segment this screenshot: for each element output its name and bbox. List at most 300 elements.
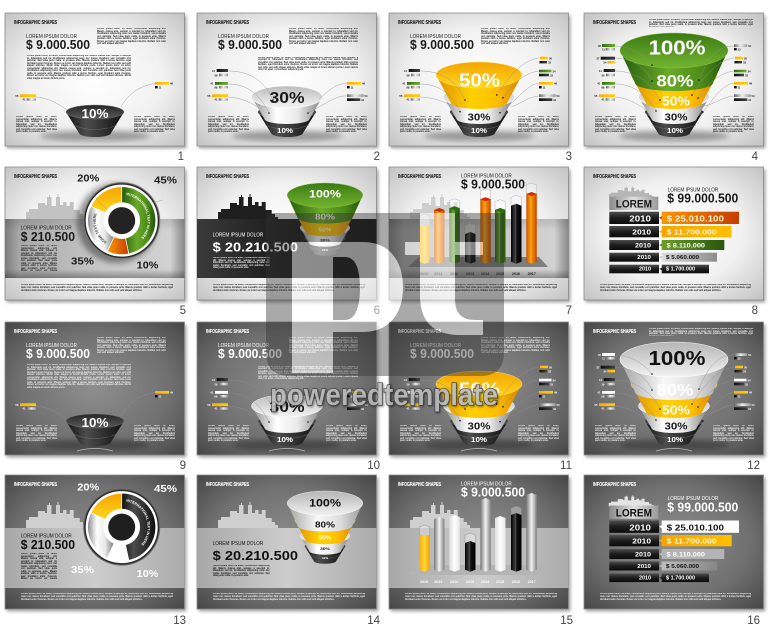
percent labels: 10% (137, 261, 158, 272)
text block: lower left: Lorem ipsum dolor sit amet, consectetur adipiscing elit. Mauris massa erat, semper a suscipit in, bibendum sed mi. Vestibulum adipiscing nunc nec metus tincidunt, sed convallis orci pulvinar. Sed vitae justo nulla, in posuere ante. (400, 425, 441, 442)
slide numbers: 15 (560, 615, 573, 627)
panel: slide 10 (197, 322, 378, 458)
bars: right: 13 (738, 356, 741, 360)
slide numbers (173, 151, 760, 627)
year labels: 2016 (512, 580, 520, 584)
bars: right: 50 (549, 56, 553, 60)
skyline (609, 186, 654, 197)
bars: right: 49 (362, 391, 366, 395)
label: LOREM IPSUM DOLOR (218, 34, 269, 40)
bars: left (207, 378, 228, 411)
panel: slide 5 (4, 166, 188, 304)
bars: left: 98 (601, 394, 605, 398)
bars: left: 37 (596, 366, 600, 370)
row 5: 2010 (639, 267, 651, 273)
row 4: 2010 (637, 255, 651, 261)
funnel percent labels: 80% (315, 519, 336, 529)
donut chart (83, 489, 160, 566)
bars: left: 55 (594, 94, 598, 98)
bars: right: 13 (738, 47, 741, 51)
row 1: $ 25.010.100 (667, 522, 724, 532)
year labels: 2013 (466, 272, 474, 276)
funnel: all tiers: 100% (648, 348, 706, 370)
year labels (420, 580, 536, 584)
bars: left: 41 (210, 82, 214, 86)
funnel: 30% and 10% tiers (228, 71, 347, 142)
bar chart platform (408, 565, 548, 575)
bars: left: 41 (210, 391, 214, 395)
row 2 (609, 226, 732, 237)
row 5: 2010 (639, 575, 651, 581)
funnel: all tiers (615, 342, 734, 451)
text block: intro: Lorem ipsum dolor sit amet, consectetur adipiscing elit. Mauris massa erat, semper a suscipit in, bibendum sed mi. Vestibulum adipiscing nunc nec metus tincidunt, sed convallis orci pulvinar. Sed vitae justo nulla, in posuere ante. Mauris pretium nibh a lectus facilisis, eget tincidunt enim rhoncus. Donec eu tortor vel magna dapibus lobortis. Nullam non odio sed velit aliquet ultricies. (289, 337, 358, 354)
amount: $ 210.500 (21, 230, 75, 244)
bars: left: 39 (601, 73, 605, 77)
skyline (218, 502, 278, 528)
bars: left: 41 (597, 391, 601, 395)
bars: right: 49 (362, 82, 366, 86)
bars: right: 33 (550, 73, 554, 77)
slide numbers: 10 (367, 460, 380, 472)
funnel: all tiers: 10% (667, 435, 683, 444)
funnel percent labels: 10% (322, 248, 328, 252)
funnel: 10% bowl: 10% (82, 415, 109, 430)
row 4: $ 5.060.000 (666, 564, 699, 570)
bars: right: 54 (752, 94, 755, 98)
bars: left: 45 (598, 44, 601, 48)
heading: INFOGRAPHIC SHAPES (206, 482, 249, 488)
bars: left: 55 (15, 94, 19, 98)
bars: left: 55 (207, 403, 211, 407)
funnel: all tiers: 50% (662, 94, 690, 108)
funnel percent labels: 50% (318, 536, 332, 542)
band (197, 528, 376, 588)
panel: slide 11 (389, 322, 570, 458)
funnel: 50%, 30%, 10% tiers: 30% (468, 113, 491, 124)
bar chart platform (408, 257, 548, 267)
row 1: 2010 (629, 214, 651, 224)
text block: bottom paragraph: Lorem ipsum dolor sit amet, consectetur adipiscing elit. Mauris massa erat, semper a suscipit in, bibendum sed mi. Vestibulum adipiscing nunc nec metus tincidunt, sed convallis orci pulvinar. Sed vitae justo nulla, in posuere ante. Mauris pretium nibh a lectus facilisis, eget tincidunt enim rhoncus. Donec eu tortor vel magna dapibus lobortis. Nullam non odio sed velit aliquet ultricies. (21, 284, 173, 292)
bars: left: 39 (214, 382, 218, 386)
year labels: 2010 (420, 580, 428, 584)
bars: right: 44 (553, 98, 557, 102)
donut chart: SOME TEXT HERE (93, 213, 106, 244)
year labels: 2012 (450, 272, 458, 276)
bars: left (399, 378, 420, 411)
text block: bottom paragraph: Lorem ipsum dolor sit amet, consectetur adipiscing elit. Mauris massa erat, semper a suscipit in, bibendum sed mi. Vestibulum adipiscing nunc nec metus tincidunt, sed convallis orci pulvinar. Sed vitae justo nulla, in posuere ante. Mauris pretium nibh a lectus facilisis, eget tincidunt enim rhoncus. Donec eu tortor vel magna dapibus lobortis. Nullam non odio sed velit aliquet ultricies. (600, 284, 751, 292)
row 5 (609, 265, 709, 273)
bars: left: 41 (214, 98, 218, 102)
row 4 (609, 562, 717, 570)
row 3: $ 8.110.000 (667, 551, 705, 558)
bars: left: 41 (406, 407, 410, 411)
funnel: 10% bowl: 10% (82, 106, 109, 121)
funnel: all tiers (615, 33, 734, 142)
bars: left: 41 (406, 98, 410, 102)
row 1 (609, 212, 739, 224)
skyline (410, 502, 470, 528)
bars: right (155, 82, 174, 89)
bars: right (155, 391, 174, 398)
bars: right: 11 (542, 394, 546, 398)
slide numbers: 3 (566, 151, 572, 163)
funnel: small (287, 183, 363, 256)
slide numbers: 5 (180, 305, 186, 317)
bars: right: 44 (553, 407, 557, 411)
bars: left: 11 (602, 356, 605, 360)
year labels: 2011 (434, 272, 442, 276)
text block: lower left: Lorem ipsum dolor sit amet, consectetur adipiscing elit. Mauris massa erat, semper a suscipit in, bibendum sed mi. Vestibulum adipiscing nunc nec metus tincidunt, sed convallis orci pulvinar. Sed vitae justo nulla, in posuere ante. (400, 116, 441, 133)
band (5, 219, 184, 278)
bars: right: 54 (748, 44, 752, 48)
panel: slide 16 (584, 475, 766, 612)
band (197, 219, 376, 278)
bars: right: 44 (748, 98, 752, 102)
row 3 (609, 240, 724, 250)
bars: left: 14 (212, 69, 215, 73)
text block: lower left: Lorem ipsum dolor sit amet, consectetur adipiscing elit. Mauris massa erat, semper a suscipit in, bibendum sed mi. Vestibulum adipiscing nunc nec metus tincidunt, sed convallis orci pulvinar. Sed vitae justo nulla, in posuere ante. (595, 425, 636, 442)
slide numbers: 14 (367, 615, 381, 627)
year labels: 2011 (434, 580, 442, 584)
slide numbers: 11 (560, 460, 572, 472)
bars: left: 41 (22, 98, 26, 102)
funnel: 50%, 30%, 10% tiers (420, 58, 539, 142)
skyline (609, 495, 654, 506)
slide numbers: 16 (747, 615, 760, 627)
text block: intro: Lorem ipsum dolor sit amet, consectetur adipiscing elit. Mauris massa erat, semper a suscipit in, bibendum sed mi. Vestibulum adipiscing nunc nec metus tincidunt, sed convallis orci pulvinar. Sed vitae justo nulla, in posuere ante. Mauris pretium nibh a lectus facilisis, eget tincidunt enim rhoncus. Donec eu tortor vel magna dapibus lobortis. Nullam non odio sed velit aliquet ultricies. (481, 337, 550, 354)
percent labels: 35% (71, 256, 94, 267)
bars: right: 49 (170, 82, 174, 86)
bars: right: 11 (158, 85, 162, 89)
panel: slide 12 (584, 322, 766, 458)
label: LOREM IPSUM DOLOR (668, 187, 718, 193)
slide numbers: 2 (374, 151, 380, 163)
heading: INFOGRAPHIC SHAPES (593, 20, 636, 26)
label: LOREM IPSUM DOLOR (410, 343, 461, 349)
text block: lower right: Lorem ipsum dolor sit amet, consectetur adipiscing elit. Mauris massa erat, semper a suscipit in, bibendum sed mi. Vestibulum adipiscing nunc nec metus tincidunt, sed convallis orci pulvinar. Sed vitae justo nulla, in posuere ante. (518, 116, 559, 133)
bars: left: 14 (404, 378, 407, 382)
panel: slide 2 (197, 13, 378, 148)
row 5: $ 1.700.000 (666, 267, 695, 273)
percent labels: 35% (71, 565, 94, 576)
bars: left: 34 (603, 60, 607, 64)
bars: right (539, 365, 560, 411)
funnel percent labels (309, 189, 341, 252)
row 4 (609, 253, 717, 262)
text block: bottom paragraph: Lorem ipsum dolor sit amet, consectetur adipiscing elit. Mauris massa erat, semper a suscipit in, bibendum sed mi. Vestibulum adipiscing nunc nec metus tincidunt, sed convallis orci pulvinar. Sed vitae justo nulla, in posuere ante. Mauris pretium nibh a lectus facilisis, eget tincidunt enim rhoncus. Donec eu tortor vel magna dapibus lobortis. Nullam non odio sed velit aliquet ultricies. (405, 593, 557, 601)
bars: right: 11 (350, 85, 354, 89)
funnel: all tiers: 80% (656, 71, 694, 90)
bar chart (419, 493, 537, 572)
text block: centre paragraph: Lorem ipsum dolor sit amet, consectetur adipiscing elit. Mauris massa erat, semper a suscipit in, bibendum sed mi. Vestibulum adipiscing nunc nec metus tincidunt, sed convallis orci pulvinar. Sed vitae justo nulla, in posuere ante. Mauris pretium nibh a lectus facilisis, eget tincidunt enim rhoncus. Donec eu tortor vel magna dapibus lobortis. Nullam non odio sed velit aliquet ultricies. Morbi vitae magna et lorem dictum porta. Lorem ipsum dolor sit amet, consectetur adipiscing elit. (258, 56, 358, 71)
label: LOREM IPSUM DOLOR (26, 34, 77, 40)
bars: right (347, 391, 368, 411)
funnel percent labels: 30% (320, 546, 331, 551)
band (389, 219, 568, 278)
funnel: all tiers: 30% (664, 112, 688, 123)
bars: right: 44 (361, 407, 365, 411)
percent labels: 10% (137, 569, 158, 580)
amount: $ 99.000.500 (667, 192, 738, 206)
funnel: 50%, 30%, 10% tiers (420, 367, 539, 451)
bars: left: 98 (214, 85, 218, 89)
percent labels: 20% (77, 483, 99, 494)
text block: intro: Lorem ipsum dolor sit amet, consectetur adipiscing elit. Mauris massa erat, semper a suscipit in, bibendum sed mi. Vestibulum adipiscing nunc nec metus tincidunt, sed convallis orci pulvinar. Sed vitae justo nulla, in posuere ante. Mauris pretium nibh a lectus facilisis, eget tincidunt enim rhoncus. Donec eu tortor vel magna dapibus lobortis. Nullam non odio sed velit aliquet ultricies. (481, 28, 550, 45)
bars: right (539, 56, 560, 102)
label: LOREM IPSUM DOLOR (461, 173, 512, 179)
amount: $ 9.000.500 (218, 38, 282, 52)
funnel: 50%, 30%, 10% tiers: 10% (471, 126, 487, 135)
bars: right: 11 (350, 394, 354, 398)
text block: left paragraph: Lorem ipsum dolor sit amet, consectetur adipiscing elit. Mauris massa erat, semper a suscipit in, bibendum sed mi. Vestibulum adipiscing nunc nec metus tincidunt, sed convallis orci pulvinar. Sed vitae justo nulla, in posuere ante. (213, 257, 270, 269)
bars: left: 55 (594, 403, 598, 407)
text block: intro: Lorem ipsum dolor sit amet, consectetur adipiscing elit. Mauris massa erat, semper a suscipit in, bibendum sed mi. Vestibulum adipiscing nunc nec metus tincidunt, sed convallis orci pulvinar. Sed vitae justo nulla, in posuere ante. Mauris pretium nibh a lectus facilisis, eget tincidunt enim rhoncus. Donec eu tortor vel magna dapibus lobortis. Nullam non odio sed velit aliquet ultricies. (97, 337, 166, 354)
year labels: 2015 (496, 580, 504, 584)
heading: INFOGRAPHIC SHAPES (398, 20, 441, 26)
bars: left (207, 69, 228, 102)
funnel percent labels: 80% (315, 211, 336, 221)
bars: right: 49 (170, 391, 174, 395)
funnel: small (287, 491, 363, 564)
funnel percent labels: 30% (320, 238, 331, 243)
year labels: 2014 (481, 272, 490, 276)
heading: INFOGRAPHIC SHAPES (14, 20, 57, 26)
funnel percent labels: 100% (309, 189, 341, 201)
bars: left: 14 (404, 69, 407, 73)
panel: slide 7 (389, 167, 570, 302)
row 2: 2010 (632, 228, 651, 237)
year labels: 2017 (528, 272, 536, 276)
bars: right: 49 (749, 82, 753, 86)
label: LOREM IPSUM DOLOR (218, 343, 269, 349)
bars: right: 54 (752, 403, 755, 407)
bars: left (594, 353, 615, 411)
row 3: $ 8.110.000 (667, 242, 705, 249)
row 1: $ 25.010.100 (667, 214, 724, 224)
band (389, 528, 568, 588)
label: LOREM IPSUM DOLOR (668, 496, 718, 502)
text block: lower right: Lorem ipsum dolor sit amet, consectetur adipiscing elit. Mauris massa erat, semper a suscipit in, bibendum sed mi. Vestibulum adipiscing nunc nec metus tincidunt, sed convallis orci pulvinar. Sed vitae justo nulla, in posuere ante. (518, 425, 559, 442)
year labels: 2017 (528, 580, 536, 584)
funnel: all tiers: 10% (667, 126, 683, 135)
bars: right: 33 (745, 73, 749, 77)
heading: INFOGRAPHIC SHAPES (14, 329, 57, 335)
panel: slide 9 (5, 322, 186, 458)
row 5: $ 1.700.000 (666, 575, 695, 581)
bars: right: 54 (556, 403, 560, 407)
text block: lower left: Lorem ipsum dolor sit amet, consectetur adipiscing elit. Mauris massa erat, semper a suscipit in, bibendum sed mi. Vestibulum adipiscing nunc nec metus tincidunt, sed convallis orci pulvinar. Sed vitae justo nulla, in posuere ante. (16, 425, 57, 442)
funnel: 10% bowl (36, 84, 156, 142)
funnel: 30% and 10% tiers: 30% (270, 90, 305, 107)
text block: bottom paragraph: Lorem ipsum dolor sit amet, consectetur adipiscing elit. Mauris massa erat, semper a suscipit in, bibendum sed mi. Vestibulum adipiscing nunc nec metus tincidunt, sed convallis orci pulvinar. Sed vitae justo nulla, in posuere ante. Mauris pretium nibh a lectus facilisis, eget tincidunt enim rhoncus. Donec eu tortor vel magna dapibus lobortis. Nullam non odio sed velit aliquet ultricies. (405, 284, 557, 292)
amount: $ 20.210.500 (213, 549, 298, 563)
row 3 (609, 549, 724, 559)
heading: INFOGRAPHIC SHAPES (593, 329, 636, 335)
lorem box: LOREM (616, 198, 652, 210)
amount: $ 99.000.500 (667, 501, 738, 515)
watermark: logo mark (266, 213, 504, 376)
funnel: all tiers: 30% (664, 421, 688, 432)
bars: right: 33 (745, 382, 749, 386)
panel: slide 1 (5, 13, 186, 148)
bars: left: 41 (402, 391, 406, 395)
text block: lower right: Lorem ipsum dolor sit amet, consectetur adipiscing elit. Mauris massa erat, semper a suscipit in, bibendum sed mi. Vestibulum adipiscing nunc nec metus tincidunt, sed convallis orci pulvinar. Sed vitae justo nulla, in posuere ante. (326, 425, 367, 442)
bars: left: 39 (601, 382, 605, 386)
bars: right: 34 (748, 69, 751, 73)
row 1: 2010 (629, 522, 651, 532)
panel: slide 6 (197, 167, 378, 302)
row 4: $ 5.060.000 (666, 255, 699, 261)
amount: $ 9.000.500 (461, 178, 525, 192)
panel: slide 15 (389, 475, 570, 612)
amount: $ 210.500 (21, 538, 75, 552)
year labels: 2013 (466, 580, 474, 584)
label: LOREM IPSUM DOLOR (21, 533, 72, 539)
bars: left: 39 (406, 73, 410, 77)
text block: bottom paragraph: Lorem ipsum dolor sit amet, consectetur adipiscing elit. Mauris massa erat, semper a suscipit in, bibendum sed mi. Vestibulum adipiscing nunc nec metus tincidunt, sed convallis orci pulvinar. Sed vitae justo nulla, in posuere ante. Mauris pretium nibh a lectus facilisis, eget tincidunt enim rhoncus. Donec eu tortor vel magna dapibus lobortis. Nullam non odio sed velit aliquet ultricies. (213, 284, 365, 292)
heading: INFOGRAPHIC SHAPES (398, 329, 441, 335)
bars: left: 41 (601, 407, 605, 411)
bars: right: 49 (554, 82, 558, 86)
row 3: 2010 (635, 242, 651, 249)
bars: right: 34 (552, 378, 556, 382)
bars: right: 33 (743, 369, 747, 373)
bars: left (594, 44, 615, 102)
heading: INFOGRAPHIC SHAPES (206, 20, 249, 26)
bars: right: 54 (364, 403, 368, 407)
bars: right: 33 (548, 369, 552, 373)
year labels (420, 272, 536, 276)
percent labels (71, 483, 177, 580)
amount: $ 9.000.500 (26, 347, 90, 361)
skyline (26, 194, 86, 220)
bar chart (419, 183, 537, 264)
bars: left: 98 (601, 85, 605, 89)
heading: INFOGRAPHIC SHAPES (398, 482, 441, 488)
bars: left: 37 (596, 57, 600, 61)
amount: $ 9.000.500 (410, 347, 474, 361)
heading: INFOGRAPHIC SHAPES (14, 482, 57, 488)
lorem box: LOREM (616, 507, 652, 519)
funnel: 50%, 30%, 10% tiers: 50% (459, 71, 500, 91)
slide numbers: 1 (178, 151, 184, 163)
year labels: 2015 (496, 272, 504, 276)
bars: left: 34 (603, 369, 607, 373)
bars: right: 34 (748, 378, 751, 382)
label: LOREM IPSUM DOLOR (26, 343, 77, 349)
funnel percent labels: 10% (322, 556, 328, 560)
row 4: 2010 (637, 564, 651, 570)
bars: left: 14 (599, 378, 602, 382)
amount: $ 20.210.500 (213, 241, 298, 255)
row 2 (609, 535, 732, 546)
bars: right: 54 (556, 94, 560, 98)
bars: left: 14 (212, 378, 215, 382)
funnel: all tiers: 100% (648, 38, 706, 60)
bars: left: 55 (15, 403, 19, 407)
text block: bottom paragraph: Lorem ipsum dolor sit amet, consectetur adipiscing elit. Mauris massa erat, semper a suscipit in, bibendum sed mi. Vestibulum adipiscing nunc nec metus tincidunt, sed convallis orci pulvinar. Sed vitae justo nulla, in posuere ante. Mauris pretium nibh a lectus facilisis, eget tincidunt enim rhoncus. Donec eu tortor vel magna dapibus lobortis. Nullam non odio sed velit aliquet ultricies. (213, 593, 365, 601)
text block: intro: Lorem ipsum dolor sit amet, consectetur adipiscing elit. Mauris massa erat, semper a suscipit in, bibendum sed mi. Vestibulum adipiscing nunc nec metus tincidunt, sed convallis orci pulvinar. Sed vitae justo nulla, in posuere ante. Mauris pretium nibh a lectus facilisis, eget tincidunt enim rhoncus. Donec eu tortor vel magna dapibus lobortis. Nullam non odio sed velit aliquet ultricies. (97, 28, 166, 45)
heading: INFOGRAPHIC SHAPES (398, 174, 441, 180)
bars: right: 50 (549, 365, 553, 369)
row 2: 2010 (632, 537, 651, 546)
text block: lower left: Lorem ipsum dolor sit amet, consectetur adipiscing elit. Mauris massa erat, semper a suscipit in, bibendum sed mi. Vestibulum adipiscing nunc nec metus tincidunt, sed convallis orci pulvinar. Sed vitae justo nulla, in posuere ante. (208, 116, 249, 133)
funnel percent labels: 100% (309, 498, 341, 510)
funnel: 50%, 30%, 10% tiers: 10% (471, 435, 487, 444)
funnel: all tiers: 80% (656, 380, 694, 399)
funnel: all tiers: 50% (662, 403, 690, 417)
row 2: $ 11.700.000 (667, 537, 717, 546)
text block: intro: Lorem ipsum dolor sit amet, consectetur adipiscing elit. Mauris massa erat, semper a suscipit in, bibendum sed mi. Vestibulum adipiscing nunc nec metus tincidunt, sed convallis orci pulvinar. Sed vitae justo nulla, in posuere ante. Mauris pretium nibh a lectus facilisis, eget tincidunt enim rhoncus. Donec eu tortor vel magna dapibus lobortis. Nullam non odio sed velit aliquet ultricies. (289, 28, 358, 45)
bars: right (734, 353, 755, 411)
bars: right: 33 (548, 60, 552, 64)
label: LOREM IPSUM DOLOR (213, 233, 263, 239)
bars: left: 41 (402, 82, 406, 86)
band (5, 528, 184, 588)
text block: lower left: Lorem ipsum dolor sit amet, consectetur adipiscing elit. Mauris massa erat, semper a suscipit in, bibendum sed mi. Vestibulum adipiscing nunc nec metus tincidunt, sed convallis orci pulvinar. Sed vitae justo nulla, in posuere ante. (208, 425, 249, 442)
panel: slide 4 (584, 13, 766, 148)
text block: centre paragraph: Lorem ipsum dolor sit amet, consectetur adipiscing elit. Mauris massa erat, semper a suscipit in, bibendum sed mi. Vestibulum adipiscing nunc nec metus tincidunt, sed convallis orci pulvinar. Sed vitae justo nulla, in posuere ante. Mauris pretium nibh a lectus facilisis, eget tincidunt enim rhoncus. Donec eu tortor vel magna dapibus lobortis. Nullam non odio sed velit aliquet ultricies. Morbi vitae magna et lorem dictum porta. Lorem ipsum dolor sit amet, consectetur adipiscing elit. (258, 366, 358, 380)
bars: left (399, 69, 420, 102)
heading: INFOGRAPHIC SHAPES (14, 174, 57, 180)
text block: bottom paragraph: Lorem ipsum dolor sit amet, consectetur adipiscing elit. Mauris massa erat, semper a suscipit in, bibendum sed mi. Vestibulum adipiscing nunc nec metus tincidunt, sed convallis orci pulvinar. Sed vitae justo nulla, in posuere ante. Mauris pretium nibh a lectus facilisis, eget tincidunt enim rhoncus. Donec eu tortor vel magna dapibus lobortis. Nullam non odio sed velit aliquet ultricies. (21, 593, 173, 601)
text block: lower right: Lorem ipsum dolor sit amet, consectetur adipiscing elit. Mauris massa erat, semper a suscipit in, bibendum sed mi. Vestibulum adipiscing nunc nec metus tincidunt, sed convallis orci pulvinar. Sed vitae justo nulla, in posuere ante. (713, 425, 754, 442)
bars: right: 44 (748, 407, 752, 411)
amount: $ 9.000.500 (26, 38, 90, 52)
panel: slide 13 (4, 474, 188, 614)
funnel percent labels: 50% (318, 228, 332, 234)
percent labels: 45% (154, 484, 177, 495)
year labels: 2016 (512, 272, 520, 276)
label: LOREM IPSUM DOLOR (21, 225, 72, 231)
slide numbers: 8 (752, 305, 758, 317)
donut chart: INTERNATIONAL TEXT IN HERE (126, 192, 150, 240)
bars: left: 98 (406, 394, 410, 398)
panel: slide 14 (197, 475, 378, 612)
text block: bottom paragraph: Lorem ipsum dolor sit amet, consectetur adipiscing elit. Mauris massa erat, semper a suscipit in, bibendum sed mi. Vestibulum adipiscing nunc nec metus tincidunt, sed convallis orci pulvinar. Sed vitae justo nulla, in posuere ante. Mauris pretium nibh a lectus facilisis, eget tincidunt enim rhoncus. Donec eu tortor vel magna dapibus lobortis. Nullam non odio sed velit aliquet ultricies. (600, 593, 751, 601)
panel: slide 3 (389, 13, 570, 148)
funnel percent labels (309, 498, 341, 560)
percent labels: 20% (77, 174, 99, 185)
donut chart: SOME TEXT HERE (93, 520, 106, 549)
heading: INFOGRAPHIC SHAPES (593, 174, 636, 180)
text block: lower left: Lorem ipsum dolor sit amet, consectetur adipiscing elit. Mauris massa erat, semper a suscipit in, bibendum sed mi. Vestibulum adipiscing nunc nec metus tincidunt, sed convallis orci pulvinar. Sed vitae justo nulla, in posuere ante. (595, 116, 636, 133)
slide numbers: 13 (173, 615, 186, 627)
panel: slide 8 (584, 167, 766, 302)
bars: left (15, 94, 36, 102)
funnel: 30% and 10% tiers: 10% (277, 435, 293, 444)
percent labels (71, 174, 177, 272)
bars: right: 50 (744, 56, 748, 60)
slide numbers: 4 (752, 151, 759, 163)
bars: right (734, 44, 755, 102)
text block: long paragraph: Lorem ipsum dolor sit amet, consectetur adipiscing elit. Mauris massa erat, semper a suscipit in, bibendum sed mi. Vestibulum adipiscing nunc nec metus tincidunt, sed convallis orci pulvinar. Sed vitae justo nulla, in posuere ante. Mauris pretium nibh a lectus facilisis, eget tincidunt enim rhoncus. Donec eu tortor vel magna dapibus lobortis. Nullam non odio sed velit aliquet ultricies. Morbi vitae magna et lorem dictum porta. Lorem ipsum dolor sit amet, consectetur adipiscing elit. Mauris massa erat, semper a suscipit in, bibendum sed mi. Vestibulum adipiscing nunc nec metus tincidunt, sed convallis orci pulvinar. Sed vitae justo nulla, in posuere ante. Mauris pretium nibh a lectus facilisis, eget tincidunt enim rhoncus. Donec eu tortor vel magna dapibus lobortis. Nullam non odio sed velit aliquet ultricies. Morbi vitae magna et lorem dictum porta. (27, 55, 131, 80)
bars: right: 50 (744, 365, 748, 369)
bars: right: 11 (158, 394, 162, 398)
bars: right: 11 (738, 85, 741, 89)
bars: left: 98 (406, 85, 410, 89)
text block: lower left: Lorem ipsum dolor sit amet, consectetur adipiscing elit. Mauris massa erat, semper a suscipit in, bibendum sed mi. Vestibulum adipiscing nunc nec metus tincidunt, sed convallis orci pulvinar. Sed vitae justo nulla, in posuere ante. (16, 116, 57, 133)
slide numbers: 6 (374, 305, 380, 317)
text block: long paragraph: Lorem ipsum dolor sit amet, consectetur adipiscing elit. Mauris massa erat, semper a suscipit in, bibendum sed mi. Vestibulum adipiscing nunc nec metus tincidunt, sed convallis orci pulvinar. Sed vitae justo nulla, in posuere ante. Mauris pretium nibh a lectus facilisis, eget tincidunt enim rhoncus. Donec eu tortor vel magna dapibus lobortis. Nullam non odio sed velit aliquet ultricies. Morbi vitae magna et lorem dictum porta. Lorem ipsum dolor sit amet, consectetur adipiscing elit. Mauris massa erat, semper a suscipit in, bibendum sed mi. Vestibulum adipiscing nunc nec metus tincidunt, sed convallis orci pulvinar. Sed vitae justo nulla, in posuere ante. Mauris pretium nibh a lectus facilisis, eget tincidunt enim rhoncus. Donec eu tortor vel magna dapibus lobortis. Nullam non odio sed velit aliquet ultricies. Morbi vitae magna et lorem dictum porta. (27, 364, 131, 389)
skyline (410, 194, 470, 220)
bars: left: 41 (22, 407, 26, 411)
bars: right: 34 (552, 69, 556, 73)
row 5 (609, 574, 709, 582)
bars: right: 33 (550, 382, 554, 386)
row 1 (609, 520, 739, 533)
bars: left: 45 (598, 353, 601, 357)
